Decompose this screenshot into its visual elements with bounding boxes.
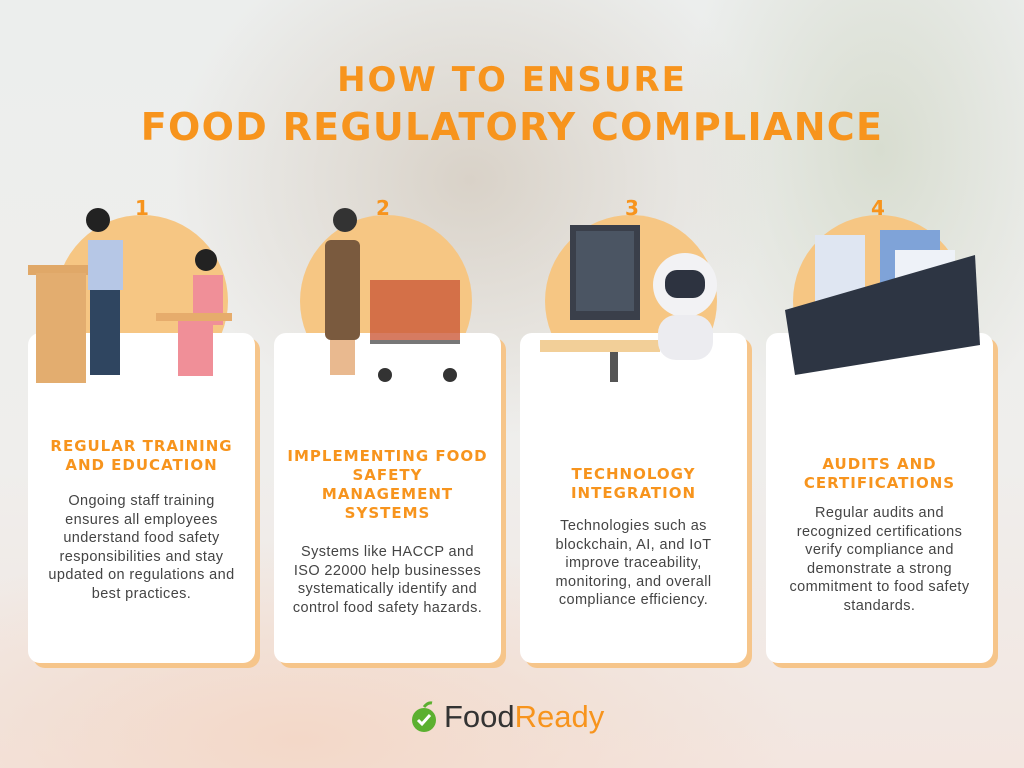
- icon: circle 2: [300, 215, 472, 387]
- heading 1: REGULAR TRAINING: [50, 437, 233, 455]
- heading 1: [50, 437, 233, 474]
- card 3: [520, 333, 747, 663]
- heading 3: TECHNOLOGY: [572, 465, 695, 483]
- illustration: robot at computer: [540, 225, 717, 382]
- number 3: 3: [625, 196, 639, 220]
- heading 2: IMPLEMENTING FOOD: [287, 447, 488, 465]
- card 2: [274, 333, 501, 663]
- logo: [412, 699, 604, 734]
- title: HOW TO ENSURE: [337, 60, 687, 100]
- panel: training: [28, 196, 260, 668]
- text 1: Ongoing staff training ensures all employees understand food safety responsibilities and stay updated on regulations and best practices.: [48, 493, 235, 602]
- heading 3: INTEGRATION: [571, 484, 696, 502]
- illustration: document tray: [785, 230, 980, 375]
- text 4: Regular audits and recognized certifications verify compliance and demonstrate a strong commitment to food safety standards.: [789, 505, 970, 614]
- text 2: Systems like HACCP and ISO 22000 help businesses systematically identify and control food safety hazards.: [293, 544, 482, 616]
- heading 2: [287, 447, 488, 522]
- icon: circle 1: [56, 215, 228, 387]
- number 4: 4: [871, 196, 885, 220]
- panel: audits: [766, 196, 998, 668]
- title: FOOD REGULATORY COMPLIANCE: [141, 105, 883, 149]
- icon: circle 3: [545, 215, 717, 387]
- heading 1: AND EDUCATION: [65, 456, 218, 474]
- heading 2: SAFETY: [352, 466, 422, 484]
- illustration: shopper: [325, 208, 460, 382]
- title: [141, 60, 883, 149]
- card 1: [28, 333, 255, 663]
- icon: apple: [412, 701, 436, 732]
- heading 2: MANAGEMENT: [322, 485, 453, 503]
- text 3: Technologies such as blockchain, AI, and IoT improve traceability, monitoring, and overall compliance efficiency.: [556, 518, 711, 608]
- heading 4: [804, 455, 955, 492]
- icon: circle 4: [793, 215, 965, 387]
- number 2: 2: [376, 196, 390, 220]
- heading 3: [571, 465, 696, 502]
- number 1: 1: [135, 196, 149, 220]
- heading 4: CERTIFICATIONS: [804, 474, 955, 492]
- heading 4: AUDITS AND: [822, 455, 937, 473]
- panel: technology: [520, 196, 752, 668]
- heading 2: SYSTEMS: [345, 504, 430, 522]
- illustration: classroom: [28, 208, 232, 383]
- logo text: FoodReady: [444, 699, 604, 734]
- panel: systems: [274, 196, 506, 668]
- card 4: [766, 333, 993, 663]
